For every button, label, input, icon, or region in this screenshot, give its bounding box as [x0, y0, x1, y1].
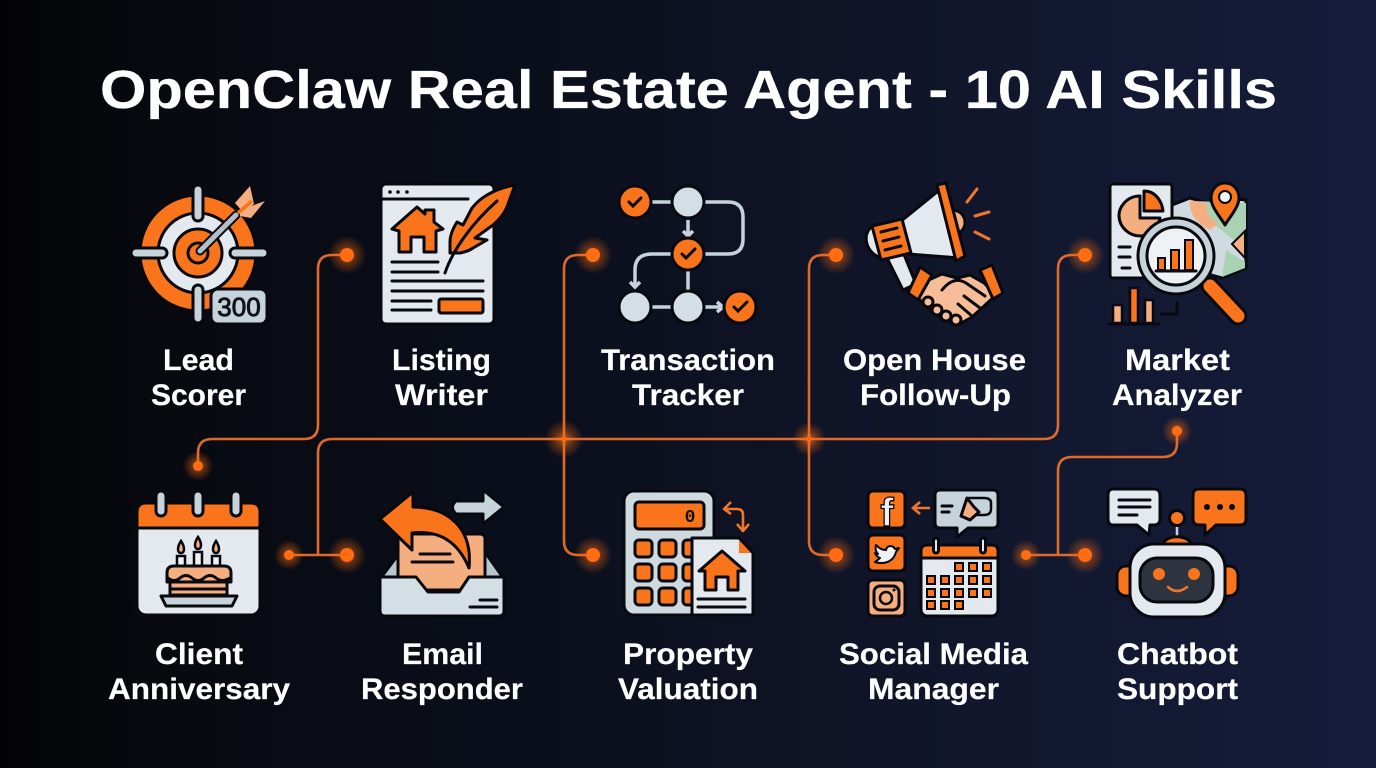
icon: market analyzer	[1109, 183, 1246, 324]
label: open house follow-up: Open House	[843, 344, 1026, 377]
label: client anniversary: Client	[155, 638, 243, 671]
label: listing writer: Listing	[392, 344, 491, 377]
title: OpenClaw Real Estate Agent - 10 AI Skills	[100, 60, 1277, 120]
icon: transaction tracker flow	[619, 186, 756, 323]
icon: lead scorer target: 300	[217, 292, 261, 322]
icon: property valuation calculator	[624, 491, 753, 615]
node glows	[183, 236, 1192, 574]
icon: social media manager	[868, 490, 998, 616]
icon: email responder	[380, 490, 504, 616]
connector: lead scorer to listing writer	[198, 255, 347, 466]
icon: client anniversary calendar	[137, 491, 260, 615]
label: market analyzer: Market	[1125, 344, 1230, 377]
label: social media manager: Social Media	[839, 638, 1028, 671]
label: lead scorer: Scorer	[151, 379, 246, 412]
connector: open house to social media	[809, 255, 836, 555]
label: chatbot support: Support	[1117, 673, 1238, 706]
icon: open house megaphone and handshake	[866, 183, 1003, 325]
label: listing writer: Writer	[395, 379, 488, 412]
label: market analyzer: Analyzer	[1112, 379, 1242, 412]
label: email responder	[361, 638, 523, 706]
label: client anniversary: Anniversary	[108, 673, 290, 706]
label: property valuation: Property	[623, 638, 753, 671]
label: chatbot support	[1117, 638, 1238, 706]
label: transaction tracker: Transaction	[601, 344, 775, 377]
label: transaction tracker	[601, 344, 775, 412]
icon: listing writer	[381, 184, 515, 324]
label: email responder: Email	[402, 638, 483, 671]
connector: transaction tracker to property valuation	[564, 255, 593, 555]
label: social media manager	[839, 638, 1028, 706]
label: open house follow-up	[843, 344, 1026, 412]
label: market analyzer	[1112, 344, 1242, 412]
icon: property valuation calculator: 0	[685, 508, 695, 528]
label: chatbot support: Chatbot	[1117, 638, 1238, 671]
label: lead scorer	[151, 344, 246, 412]
label: social media manager: Manager	[868, 673, 999, 706]
label: email responder: Responder	[361, 673, 523, 706]
circuit connectors	[183, 236, 1192, 574]
label: property valuation	[618, 638, 758, 706]
label: property valuation: Valuation	[618, 673, 758, 706]
label: transaction tracker: Tracker	[632, 379, 744, 412]
label: listing writer	[392, 344, 491, 412]
icon: chatbot support	[1108, 489, 1246, 617]
connector: main bus from client anniversary to market analyzer	[289, 255, 1085, 555]
connector: social media to chatbot and market analyzer	[1026, 431, 1177, 555]
label: lead scorer: Lead	[163, 344, 234, 377]
label: client anniversary	[108, 638, 290, 706]
connector nodes	[193, 248, 1182, 562]
icon: lead scorer target	[131, 185, 268, 324]
label: open house follow-up: Follow-Up	[860, 379, 1011, 412]
icon: social media manager: f	[880, 491, 894, 535]
